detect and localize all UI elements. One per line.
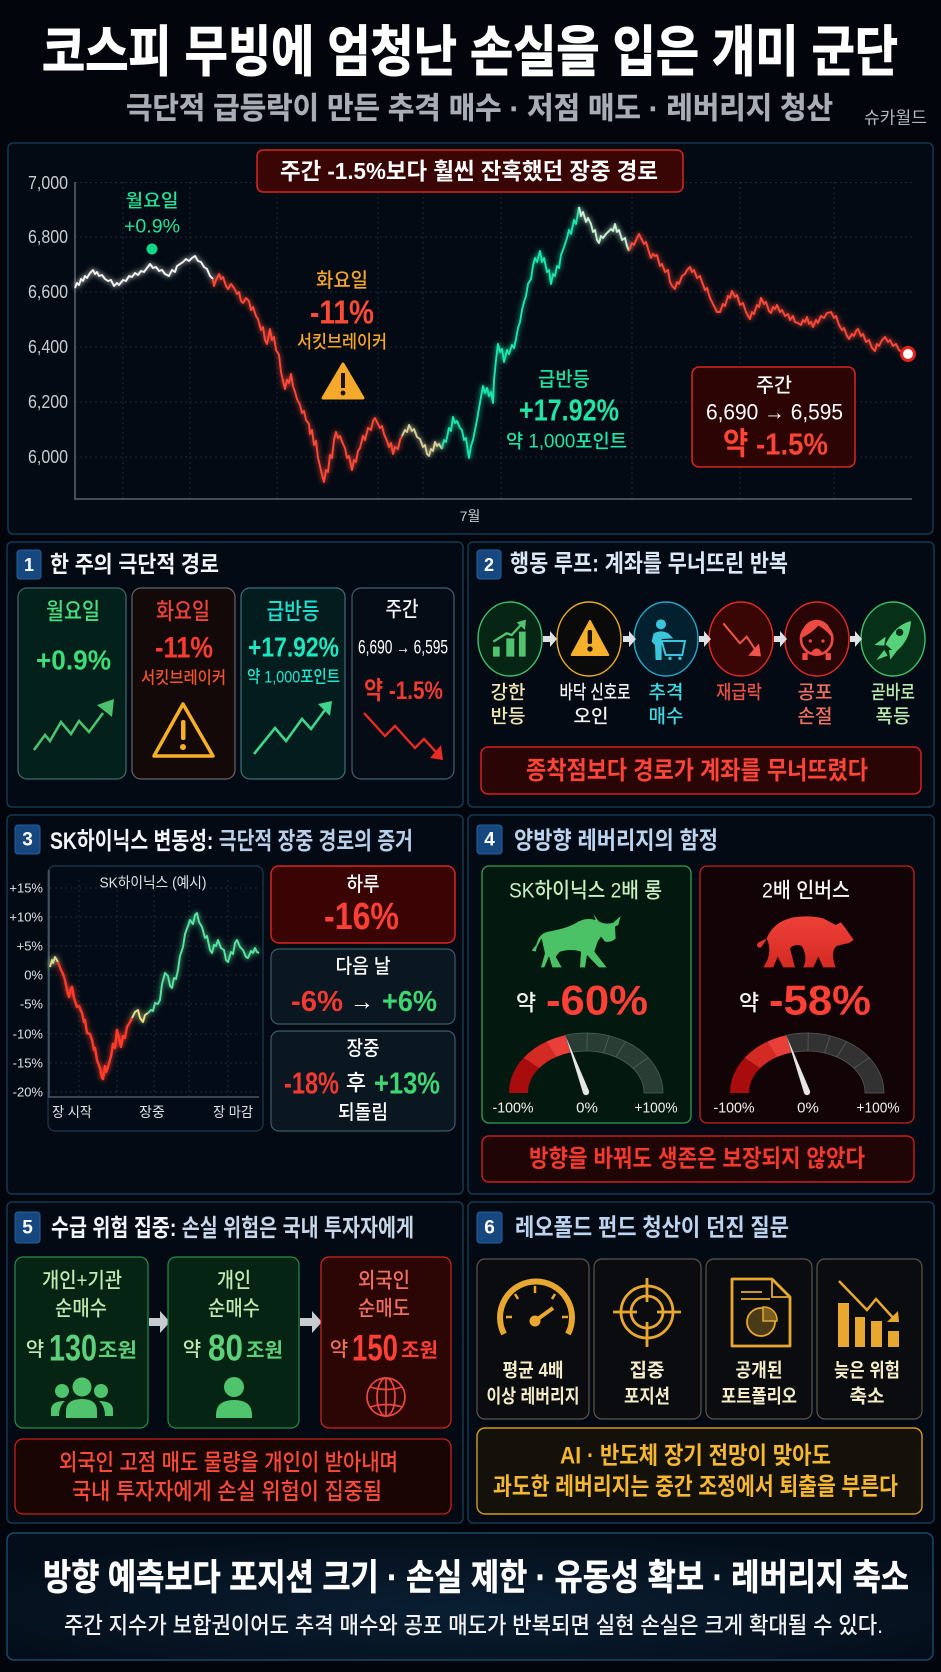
card: foreign investors: 조원 xyxy=(401,1339,438,1362)
loop step labels: 곧바로 xyxy=(871,682,915,704)
card: retail + institutions: 개인+기관 xyxy=(42,1270,122,1292)
stat: intraday: +13% xyxy=(374,1066,440,1100)
badge 3 xyxy=(15,825,40,854)
y axis labels xyxy=(9,880,43,1100)
panel 4: two-way leverage trap xyxy=(468,815,934,1194)
conclusion banner: 방향을 바꿔도 생존은 보장되지 않았다 xyxy=(529,1146,865,1172)
card: 2x long: -100% xyxy=(492,1100,534,1116)
annotation: rebound: +17.92% xyxy=(519,392,619,428)
stat: intraday: 장중 xyxy=(346,1037,380,1060)
card: late de-risking: 축소 xyxy=(850,1386,884,1408)
y axis labels: -20% xyxy=(13,1084,43,1100)
stat: intraday: -18% xyxy=(284,1066,339,1100)
badge 3: 3 xyxy=(22,830,33,850)
badge 6 xyxy=(477,1212,502,1243)
conclusion banner: 종착점보다 경로가 계좌를 무너뜨렸다 xyxy=(526,757,868,785)
loop step labels: 추격 xyxy=(649,682,683,704)
card: late de-risking: 늦은 위험 xyxy=(834,1360,900,1382)
gauge hub xyxy=(530,1316,540,1326)
card: retail: 개인 xyxy=(217,1270,251,1292)
icon: warning xyxy=(572,621,608,655)
card: Monday xyxy=(18,588,126,779)
card: Tuesday: -11% xyxy=(155,632,213,664)
chart headline banner xyxy=(257,150,683,192)
line chart: SK hynix: SK하이닉스 (예시) xyxy=(100,874,207,892)
card: late de-risking xyxy=(817,1259,922,1419)
y axis labels: 6,000 xyxy=(28,447,68,467)
card: rebound xyxy=(241,588,345,779)
card: leverage: 이상 레버리지 xyxy=(486,1386,580,1408)
y axis labels: +10% xyxy=(9,910,43,924)
annotation: rebound: 약 1,000포인트 xyxy=(506,430,627,452)
card: rebound: +17.92% xyxy=(248,632,339,662)
loop step labels: 폭등 xyxy=(876,706,910,728)
loop step labels: 강한 xyxy=(491,682,525,704)
chart headline banner: 주간 -1.5%보다 훨씬 잔혹했던 장중 경로 xyxy=(280,158,658,184)
conclusion banner xyxy=(481,747,921,794)
y axis labels: 6,600 xyxy=(28,282,68,302)
conclusion banner xyxy=(482,1136,914,1182)
stat: one day: 하루 xyxy=(346,873,380,896)
badge 1 xyxy=(17,550,41,579)
card: weekly: 약 -1.5% xyxy=(364,677,443,705)
card: public portfolio: 공개된 xyxy=(736,1360,782,1382)
card: retail + institutions: 약 xyxy=(26,1338,44,1361)
x axis label: 7월 xyxy=(460,508,480,524)
badge 1: 1 xyxy=(24,555,34,575)
y axis labels: -10% xyxy=(13,1026,43,1042)
annotation: Monday: 월요일 xyxy=(126,191,178,211)
badge 6: 6 xyxy=(484,1218,495,1238)
card: Tuesday: 서킷브레이커 xyxy=(141,668,226,688)
card: retail + institutions: 순매수 xyxy=(55,1298,107,1320)
annotation: Tuesday circuit breaker xyxy=(297,269,387,398)
annotation: rebound: 급반등 xyxy=(538,368,590,391)
card: retail: 약 xyxy=(183,1338,201,1361)
icon: speedometer xyxy=(500,1282,572,1334)
warning banner xyxy=(15,1439,451,1514)
line chart: SK hynix: 장 마감 xyxy=(213,1104,253,1120)
panel 1 heading: 한 주의 극단적 경로 xyxy=(50,551,219,577)
card: Tuesday xyxy=(132,588,235,779)
card: leverage: 평균 4배 xyxy=(502,1360,564,1382)
card: retail + institutions: 조원 xyxy=(98,1339,137,1362)
stat: intraday: 되돌림 xyxy=(338,1101,388,1124)
icon: crosshair xyxy=(613,1278,681,1347)
card: public portfolio: 포트폴리오 xyxy=(721,1386,797,1408)
badge 4 xyxy=(477,825,502,854)
card: rebound: 약 1,000포인트 xyxy=(247,668,340,686)
footer panel xyxy=(7,1533,933,1660)
card: 2x inverse: 2배 인버스 xyxy=(762,880,850,902)
annotation: Monday: +0.9% xyxy=(124,216,180,238)
source credit: 슈카월드 xyxy=(864,108,927,128)
panel 4 heading: 양방향 레버리지의 함정 xyxy=(514,828,718,854)
badge 5: 5 xyxy=(22,1218,33,1238)
card: foreign investors: 외국인 xyxy=(358,1270,410,1292)
callout: weekly change xyxy=(692,367,855,467)
line chart: KOSPI intraday path xyxy=(75,207,907,482)
card: foreign investors: 약 xyxy=(330,1338,348,1361)
card: weekly xyxy=(352,588,454,779)
card: foreign investors: 150 xyxy=(352,1328,398,1368)
icon: three people xyxy=(51,1378,113,1418)
panel 5: supply risk xyxy=(7,1202,463,1523)
stat: intraday xyxy=(271,1031,455,1131)
card: 2x long: 0% xyxy=(576,1100,598,1116)
stat: next day: -6% xyxy=(291,986,343,1018)
annotation: Tuesday circuit breaker: 서킷브레이커 xyxy=(297,332,387,352)
annotation: Tuesday circuit breaker: -11% xyxy=(310,294,374,330)
y axis labels: +5% xyxy=(17,938,43,954)
stat: next day: 다음 날 xyxy=(336,955,390,978)
stat: intraday: 후 xyxy=(346,1070,366,1096)
y axis labels: 7,000 xyxy=(28,173,68,193)
subtitle: 극단적 급등락이 만든 추격 매수 · 저점 매도 · 레버리지 청산 xyxy=(126,92,833,126)
y axis labels: +15% xyxy=(9,880,43,896)
badge 5 xyxy=(15,1212,40,1243)
y axis labels: 6,800 xyxy=(28,227,68,247)
card: 2x inverse xyxy=(700,866,914,1123)
card: weekly: 주간 xyxy=(386,598,418,622)
card: 2x long: +100% xyxy=(634,1100,678,1116)
card: foreign investors: 순매도 xyxy=(358,1298,410,1320)
loop step labels: 오인 xyxy=(574,706,608,728)
card: Tuesday: 화요일 xyxy=(156,598,210,624)
warning banner: 외국인 고점 매도 물량을 개인이 받아내며 xyxy=(59,1449,398,1475)
end marker xyxy=(902,348,914,360)
card: concentrated position: 포지션 xyxy=(624,1386,670,1408)
card: foreign investors xyxy=(321,1257,451,1428)
line chart: SK hynix xyxy=(48,866,263,1131)
annotation: rebound xyxy=(506,368,627,452)
panel 6: Leopold fund xyxy=(468,1202,934,1523)
loop step labels: 바닥 신호로 xyxy=(560,682,630,704)
callout: weekly change: 주간 xyxy=(756,374,792,397)
loop step labels: 재급락 xyxy=(716,682,762,704)
icon: rising bars xyxy=(493,620,526,657)
card: 2x long: 약 xyxy=(516,990,536,1016)
panel 1: weekly path xyxy=(7,542,463,807)
gauge xyxy=(730,1033,884,1095)
panel 5 heading: 수급 위험 집중: 손실 위험은 국내 투자자에게 xyxy=(51,1214,414,1242)
stat: next day xyxy=(271,949,455,1024)
panel 3: SK hynix volatility xyxy=(7,815,463,1194)
card: rebound: 급반등 xyxy=(266,598,320,624)
loop circles and arrows xyxy=(478,602,925,676)
y axis labels: 6,400 xyxy=(28,337,68,357)
stat: next day: +6% xyxy=(382,986,437,1018)
card: retail + institutions: 130 xyxy=(49,1328,97,1368)
stat: one day: -16% xyxy=(324,896,399,938)
gold conclusion banner: AI · 반도체 장기 전망이 맞아도 xyxy=(560,1442,831,1470)
icon: globe xyxy=(367,1378,405,1416)
line chart: SK hynix: 장중 xyxy=(139,1104,165,1120)
card: public portfolio xyxy=(706,1259,812,1419)
badge 4: 4 xyxy=(484,830,495,850)
card: retail: 순매수 xyxy=(208,1298,260,1320)
panel: KOSPI main chart xyxy=(8,143,933,534)
card: 2x inverse: -100% xyxy=(714,1100,754,1116)
panel 2 heading: 행동 루프: 계좌를 무너뜨린 반복 xyxy=(510,550,788,578)
y axis labels: -15% xyxy=(13,1056,43,1070)
panel 6 heading: 레오폴드 펀드 청산이 던진 질문 xyxy=(515,1214,789,1242)
card: 2x long xyxy=(482,866,691,1123)
card: 2x inverse: +100% xyxy=(856,1100,900,1116)
card: Monday: +0.9% xyxy=(36,644,111,676)
footer note: 주간 지수가 보합권이어도 추격 매수와 공포 매도가 반복되면 실현 손실은 크게 확대될 수 있다. xyxy=(64,1612,883,1638)
gold conclusion banner xyxy=(477,1428,922,1514)
callout: weekly change: 약 -1.5% xyxy=(723,426,828,462)
icon: declining bars xyxy=(838,1281,899,1347)
y axis labels: 6,200 xyxy=(28,392,68,412)
icon: rocket xyxy=(874,621,911,660)
loop step labels: 반등 xyxy=(491,706,525,728)
line chart: SK hynix: 장 시작 xyxy=(52,1104,92,1120)
stat: one day xyxy=(271,866,455,943)
card: concentrated position xyxy=(594,1259,701,1419)
icon: chasing buyer xyxy=(652,619,685,660)
card: retail: 조원 xyxy=(246,1339,283,1362)
card: 2x long: -60% xyxy=(546,976,648,1024)
loop step labels: 공포 xyxy=(798,682,832,704)
callout: weekly change: 6,690 → 6,595 xyxy=(706,400,843,424)
card: 2x inverse: 약 xyxy=(739,990,759,1016)
card: leverage xyxy=(477,1259,589,1419)
icon: bull xyxy=(532,914,621,967)
arrow xyxy=(149,1311,170,1333)
card: weekly: 6,690 → 6,595 xyxy=(358,638,448,658)
icon: document with pie chart xyxy=(732,1279,790,1346)
card: 2x inverse: 0% xyxy=(797,1100,819,1116)
icon: fearful face xyxy=(801,620,832,660)
loop step labels: 손절 xyxy=(798,706,832,728)
warning banner: 국내 투자자에게 손실 위험이 집중됨 xyxy=(72,1478,382,1504)
card: Monday: 월요일 xyxy=(46,598,100,624)
badge 2 xyxy=(477,550,501,579)
icon: bear xyxy=(757,916,854,967)
badge 2: 2 xyxy=(484,555,494,575)
card: 2x long: SK하이닉스 2배 롱 xyxy=(509,880,662,902)
annotation: Monday xyxy=(124,191,180,254)
loop step labels xyxy=(491,682,915,728)
stat: next day: → xyxy=(350,988,374,1016)
annotation: Tuesday circuit breaker: 화요일 xyxy=(316,269,368,292)
card: retail + institutions xyxy=(15,1257,148,1428)
panel 2: behaviour loop xyxy=(468,542,934,807)
arrow xyxy=(300,1311,322,1333)
y axis labels: -5% xyxy=(20,996,43,1012)
card: 2x inverse: -58% xyxy=(769,976,871,1024)
y axis labels: 0% xyxy=(24,968,43,982)
y axis labels xyxy=(28,173,68,467)
loop step labels: 매수 xyxy=(649,706,683,728)
gauge xyxy=(509,1033,663,1095)
card: concentrated position: 집중 xyxy=(630,1360,664,1382)
card: retail: 80 xyxy=(208,1328,243,1368)
icon: person xyxy=(216,1377,252,1418)
card: retail xyxy=(168,1257,299,1428)
icon: falling arrow xyxy=(723,623,761,656)
panel 3 heading: SK하이닉스 변동성: 극단적 장중 경로의 증거 xyxy=(50,828,413,854)
